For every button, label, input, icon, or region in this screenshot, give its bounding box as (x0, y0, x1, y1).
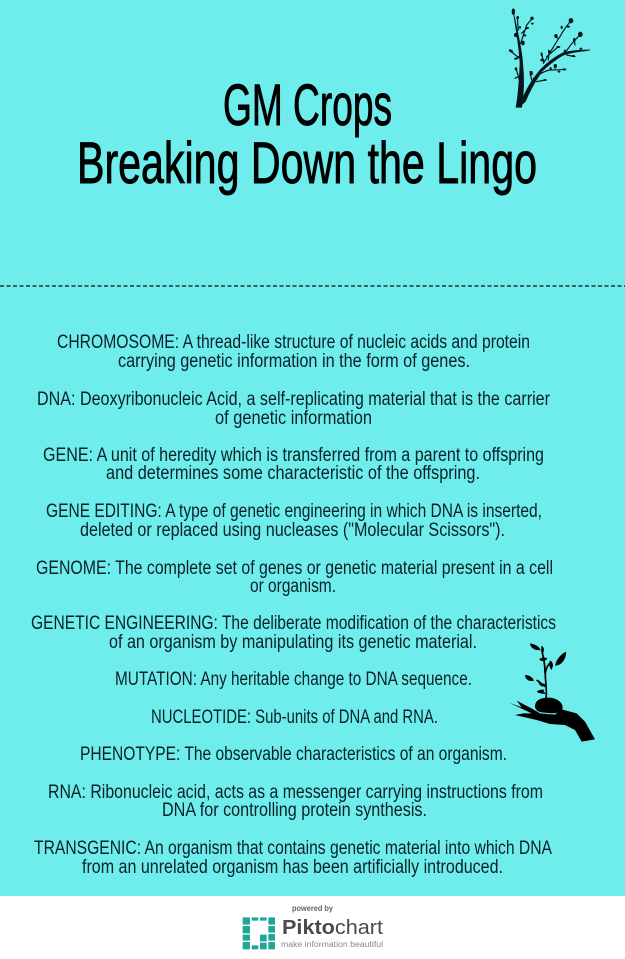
definition: gene (43, 445, 544, 484)
definition: RNA: DNA for controlling protein synthesis. (162, 800, 427, 821)
definition: chromosome (57, 332, 530, 372)
definition: mutation: MUTATION: Any heritable change to DNA sequence. (115, 669, 472, 690)
definition: phenotype: PHENOTYPE: The observable characteristics of an organism. (80, 744, 507, 765)
definition: gene editing: deleted or replaced using nucleases ("Molecular Scissors"). (80, 520, 505, 541)
definition: genetic engineering (31, 613, 556, 653)
footer panel (0, 896, 625, 959)
definition: transgenic (34, 838, 552, 878)
tagline: make information beautiful (281, 940, 383, 949)
powered by label: powered by (292, 904, 334, 913)
definition: genetic engineering: of an organism by manipulating its genetic material. (109, 632, 477, 653)
definition: RNA: RNA: Ribonucleic acid, acts as a messenger carrying instructions from (48, 782, 543, 803)
definitions text block (31, 332, 556, 878)
definition: DNA: DNA: Deoxyribonucleic Acid, a self-replicating material that is the carrier (37, 389, 551, 410)
definition: gene: GENE: A unit of heredity which is transferred from a parent to offspring (43, 445, 544, 466)
definition: gene: and determines some characteristic of the offspring. (106, 463, 480, 484)
definition: transgenic: from an unrelated organism has been artificially introduced. (82, 857, 503, 878)
definition: gene editing (46, 501, 542, 541)
definition: chromosome: carrying genetic information in the form of genes. (118, 351, 470, 372)
definition: genome: or organism. (250, 576, 336, 597)
wordmark: Piktochart (282, 917, 383, 939)
icon: hand holding seedling (509, 643, 595, 742)
definition: DNA (37, 389, 551, 429)
title: GM Crops (223, 73, 392, 138)
icon: branch (508, 8, 590, 107)
definition: genome (36, 558, 553, 597)
dashed divider (0, 285, 625, 287)
icon: piktochart logo (243, 917, 275, 949)
definition: RNA (48, 782, 543, 821)
definition: DNA: of genetic information (215, 408, 372, 429)
title (77, 73, 537, 196)
definition: chromosome: CHROMOSOME: A thread-like structure of nucleic acids and protein (57, 332, 530, 353)
definition: nucleotide: NUCLEOTIDE: Sub-units of DNA and RNA. (151, 707, 438, 728)
